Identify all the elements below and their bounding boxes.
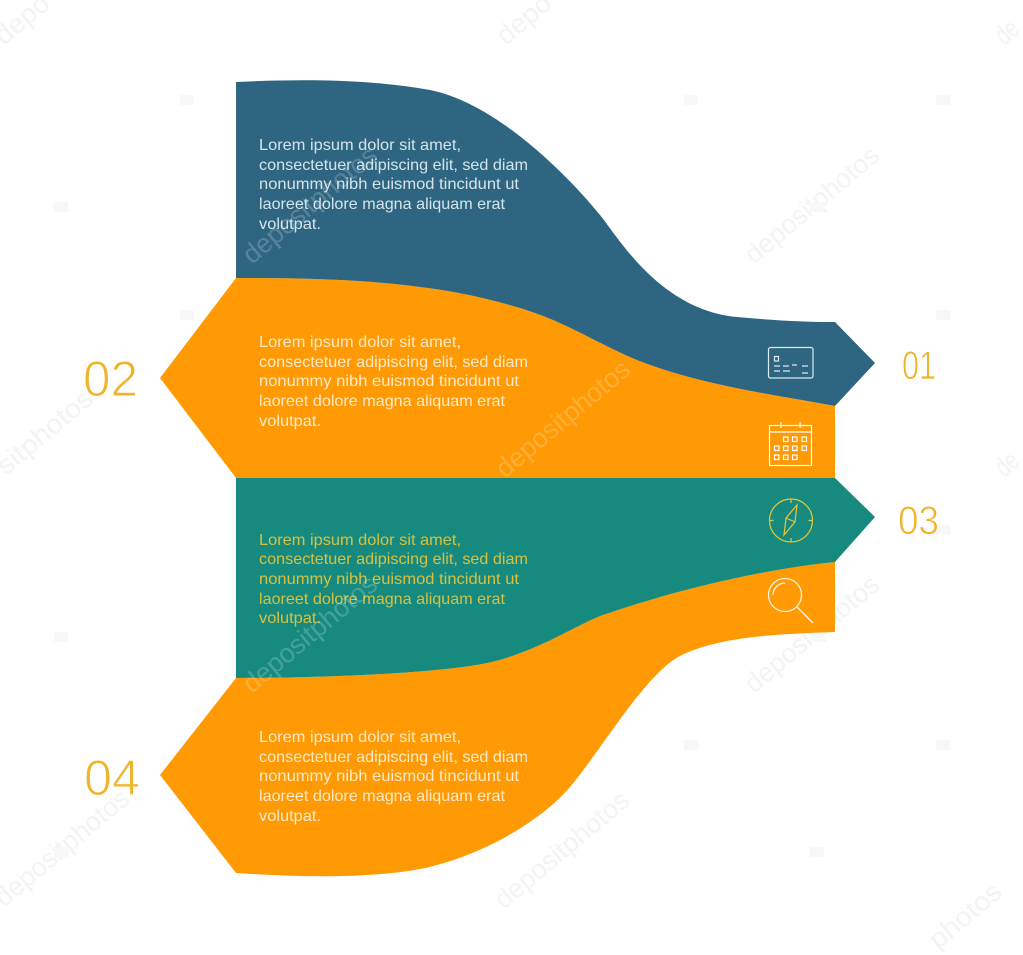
watermark over panels: depositphotos — [237, 569, 383, 699]
text block 02: Lorem ipsum dolor sit amet, — [259, 334, 461, 351]
text block 01: nonummy nibh euismod tincidunt ut — [259, 176, 520, 193]
text block 03: Lorem ipsum dolor sit amet, — [259, 532, 461, 549]
text block 04: volutpat. — [259, 808, 321, 825]
text block 04: laoreet dolore magna aliquam erat — [259, 788, 506, 805]
panel 03: teal ribbon — [236, 478, 875, 678]
icon: credit card — [768, 348, 813, 378]
text block 04: consectetuer adipiscing elit, sed diam — [259, 749, 528, 766]
text block 01: consectetuer adipiscing elit, sed diam — [259, 157, 528, 174]
text block 03: volutpat. — [259, 610, 321, 627]
icon: magnifier — [768, 578, 813, 623]
watermark over panels — [237, 140, 636, 699]
background watermark: photos — [923, 876, 1008, 955]
text block 02 — [259, 334, 528, 430]
background watermark: depositphotos — [489, 785, 635, 915]
number 03: 03 — [898, 499, 939, 543]
watermark over panels: depositphotos — [237, 140, 383, 270]
text block 01 — [259, 137, 528, 233]
number 04: 04 — [84, 750, 140, 806]
text block 04 — [259, 729, 528, 825]
panel 04: orange ribbon — [160, 562, 835, 876]
watermark over panels: depositphotos — [490, 354, 636, 484]
panel 01: blue ribbon — [236, 80, 875, 406]
text block 03: consectetuer adipiscing elit, sed diam — [259, 551, 528, 568]
text block 03 — [259, 532, 528, 627]
text block 02: consectetuer adipiscing elit, sed diam — [259, 354, 528, 371]
text block 04: nonummy nibh euismod tincidunt ut — [259, 768, 520, 785]
text block 03: nonummy nibh euismod tincidunt ut — [259, 571, 520, 588]
text block 01: Lorem ipsum dolor sit amet, — [259, 137, 461, 154]
icon: calendar — [770, 422, 812, 466]
number 01: 01 — [902, 344, 936, 388]
panel 02: orange ribbon — [160, 278, 835, 478]
background watermark: depositphotos — [739, 140, 885, 270]
text block 04: Lorem ipsum dolor sit amet, — [259, 729, 461, 746]
text block 03: laoreet dolore magna aliquam erat — [259, 591, 506, 608]
number 02: 02 — [83, 351, 138, 407]
text block 01: laoreet dolore magna aliquam erat — [259, 196, 506, 213]
text block 01: volutpat. — [259, 216, 321, 233]
text block 02: volutpat. — [259, 413, 321, 430]
icon: compass — [770, 499, 812, 542]
text block 02: laoreet dolore magna aliquam erat — [259, 393, 506, 410]
text block 02: nonummy nibh euismod tincidunt ut — [259, 373, 520, 390]
background watermark: depositphotos — [739, 569, 885, 699]
